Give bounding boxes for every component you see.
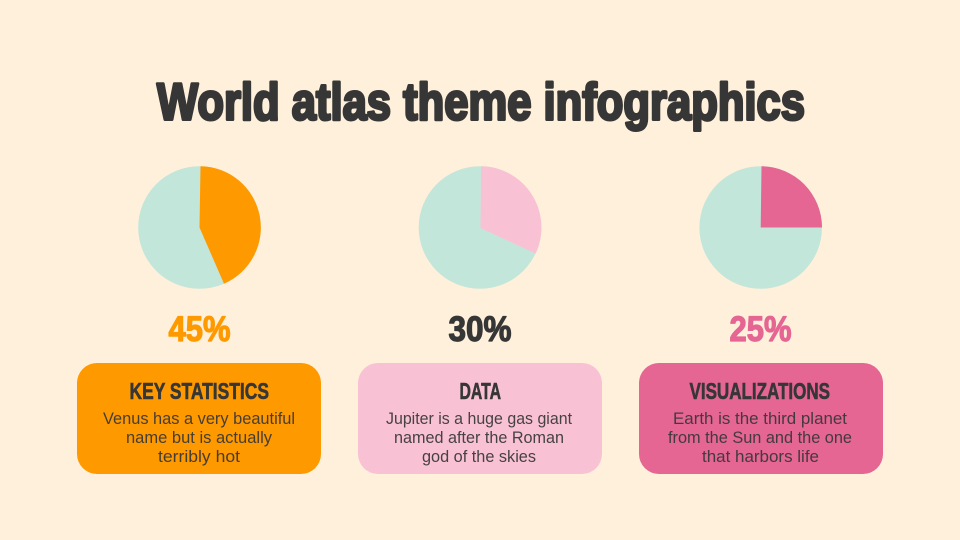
card: visualizations: Earth is the third planet — [673, 409, 847, 428]
card: key statistics: name but is actually — [126, 428, 272, 447]
card: key statistics: KEY STATISTICS — [130, 378, 269, 404]
pie chart: 45% — [138, 166, 261, 289]
pie chart: 30% — [419, 166, 541, 289]
title: World atlas theme infographics — [157, 74, 805, 132]
card: data: DATA — [460, 378, 501, 404]
percentage: 30%: 30% — [448, 310, 512, 349]
card: data: Jupiter is a huge gas giant — [386, 409, 572, 428]
card: key statistics: Venus has a very beautiful — [103, 409, 295, 428]
panel: data — [358, 166, 602, 474]
card: key statistics: terribly hot — [158, 447, 240, 466]
panel: key statistics — [77, 166, 321, 474]
card: data: named after the Roman — [394, 428, 564, 447]
card: visualizations: VISUALIZATIONS — [690, 378, 830, 404]
card: visualizations: from the Sun and the one — [668, 428, 852, 447]
pie chart: 25% — [699, 166, 822, 289]
card: visualizations — [639, 363, 883, 474]
card: key statistics — [77, 363, 321, 474]
percentage: 45%: 45% — [168, 310, 230, 349]
card: visualizations: that harbors life — [702, 447, 819, 466]
panel: visualizations — [639, 166, 883, 474]
card: data: god of the skies — [422, 447, 536, 466]
card: data — [358, 363, 602, 474]
percentage: 25%: 25% — [730, 310, 792, 349]
